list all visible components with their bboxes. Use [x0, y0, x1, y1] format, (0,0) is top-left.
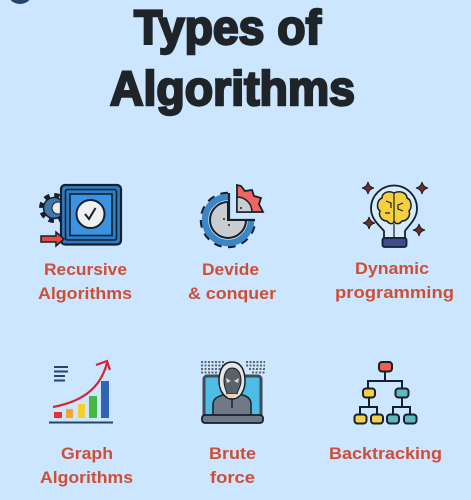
- icon: bar chart with arrow: [49, 361, 113, 422]
- label: recursive algorithms: [38, 260, 132, 303]
- title: Types of: [134, 2, 322, 55]
- label: backtracking: Backtracking: [329, 444, 442, 463]
- icon: gear pie: [203, 185, 263, 244]
- label: devide and conquer: [188, 260, 276, 303]
- label: brute force: [209, 444, 256, 487]
- item: dynamic programming: [335, 182, 454, 302]
- label: dynamic programming: [335, 259, 454, 302]
- icon: hooded hacker on laptop: [201, 362, 265, 423]
- title: Algorithms: [110, 63, 355, 116]
- logo fragment: [7, 0, 33, 4]
- label: brute force: force: [210, 468, 255, 487]
- icon: brain light bulb: [362, 182, 428, 247]
- label: graph algorithms: [40, 444, 133, 487]
- label: devide and conquer: Devide: [202, 260, 259, 279]
- label: brute force: Brute: [209, 444, 256, 463]
- icon: tree diagram: [354, 362, 416, 424]
- label: devide and conquer: & conquer: [188, 284, 276, 303]
- item: recursive algorithms: [38, 185, 132, 303]
- label: dynamic programming: programming: [335, 283, 454, 302]
- label: recursive algorithms: Recursive: [44, 260, 127, 279]
- label: dynamic programming: Dynamic: [355, 259, 429, 278]
- label: graph algorithms: Algorithms: [40, 468, 133, 487]
- item: backtracking: [329, 362, 442, 463]
- item: graph algorithms: [40, 361, 133, 487]
- item: brute force: [201, 362, 265, 487]
- item: devide and conquer: [188, 185, 276, 303]
- label: recursive algorithms: Algorithms: [38, 284, 132, 303]
- icon: gear and nested squares: [41, 185, 121, 246]
- label: graph algorithms: Graph: [61, 444, 113, 463]
- title: [110, 2, 355, 116]
